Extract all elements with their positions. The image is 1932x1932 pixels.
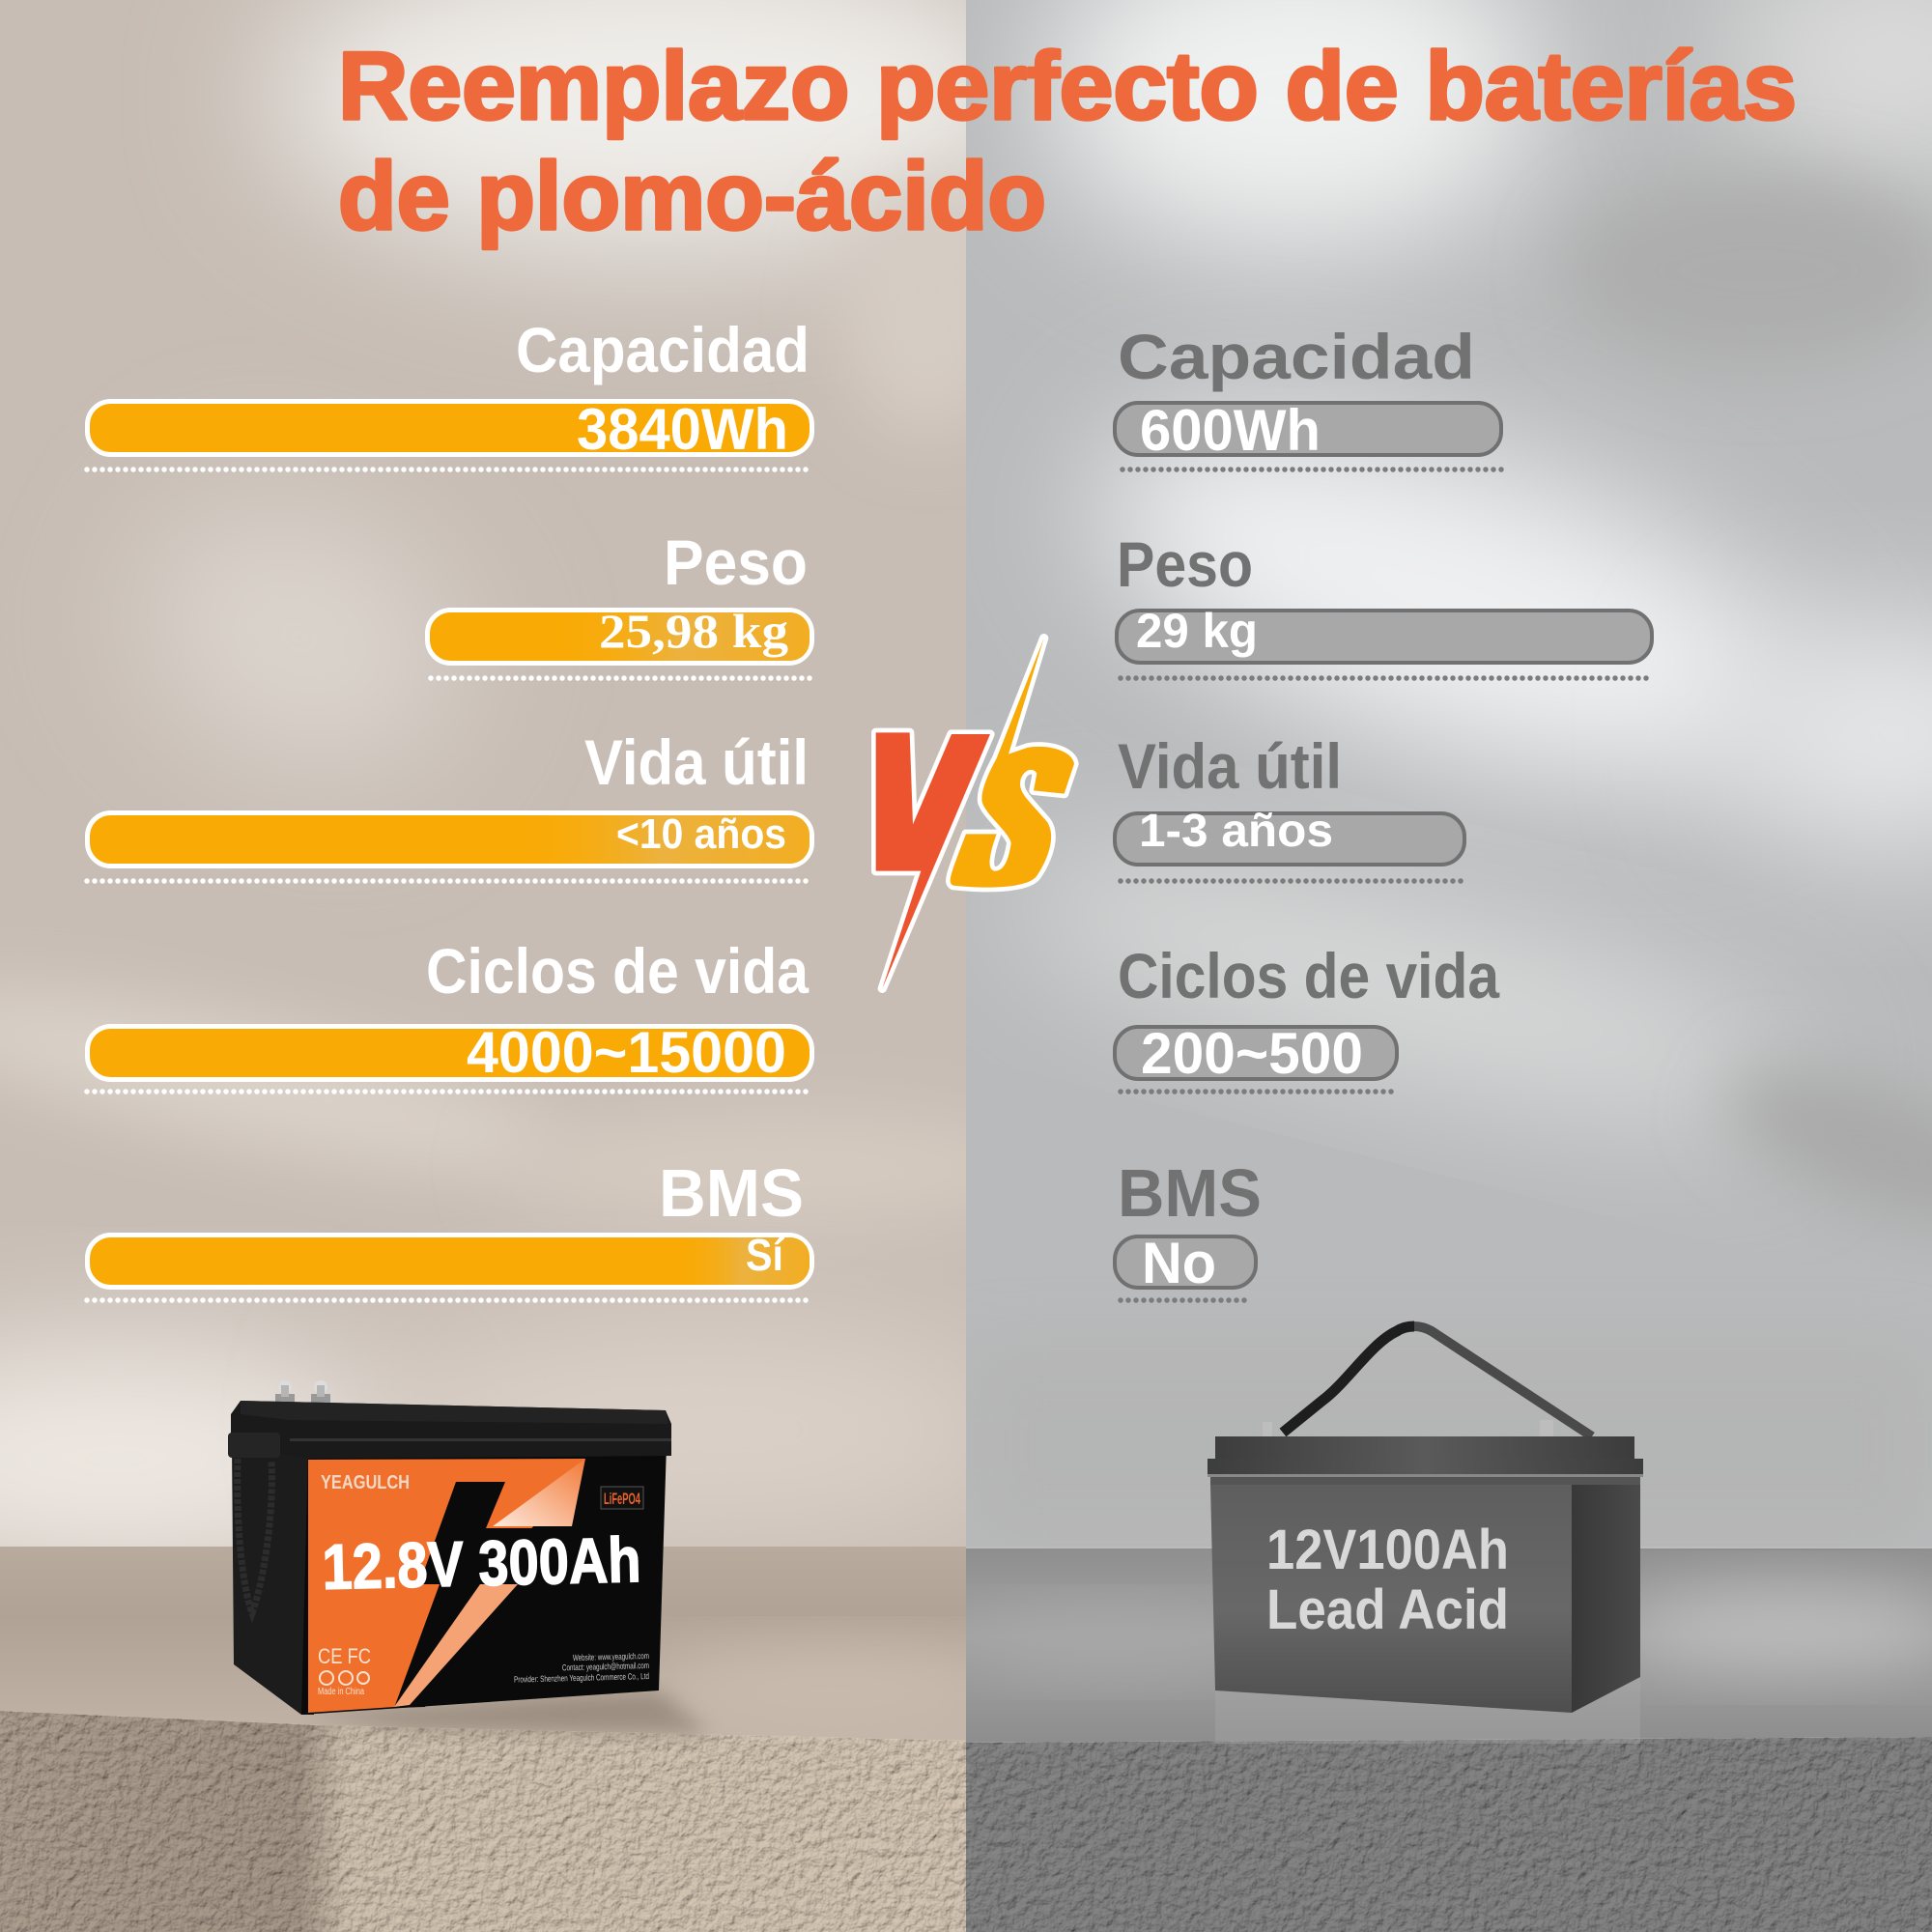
metric: bms right [1115,1155,1262,1300]
panel: left metrics [87,314,813,1300]
metric: peso left: Peso [664,526,808,598]
orange label [308,1459,585,1713]
metric: ciclos right: Ciclos de vida [1118,940,1500,1011]
metric: peso left: 25,98 kg [599,604,788,658]
front face [1210,1485,1572,1713]
black bolt [394,1482,537,1708]
reflection [1215,1677,1640,1744]
icon: LiFePO4 battery [228,1380,710,1734]
metric: bms right: No [1142,1231,1216,1295]
metric: ciclos right: 200~500 [1141,1021,1363,1086]
strap [1283,1326,1414,1433]
letter V [876,732,990,988]
metric: bms left [87,1155,813,1300]
metric: capacidad left [87,314,813,469]
contact text: Contact: yeagulch@hotmail.com [562,1661,649,1672]
battery shadow [301,1690,710,1734]
metric: vida util right [1115,730,1464,881]
metric: peso right: Peso [1117,528,1253,600]
panel: left warm background [0,0,1043,1932]
metric: vida util left: Vida útil [584,726,809,798]
left textured ledge [0,1711,966,1932]
left tabletop [0,1547,966,1749]
title [338,32,1797,249]
terminals [1263,1420,1553,1436]
contact text [514,1651,649,1685]
metric: bms left: Sí [746,1230,785,1280]
logo: YEAGULCH [321,1472,410,1493]
contact text: Website: www.yeagulch.com [573,1651,649,1662]
metric: capacidad right [1115,321,1502,469]
metric: peso right [1117,528,1652,678]
lid [1215,1436,1634,1460]
certification marks: Made in China [318,1687,364,1697]
metric: ciclos left [87,935,813,1092]
panel: right metrics [1115,321,1652,1300]
label 12V100Ah: 12V100Ah [1266,1519,1509,1581]
metric: ciclos left: Ciclos de vida [426,935,810,1007]
contact text: Provider: Shenzhen Yeagulch Commerce Co., Ltd [514,1671,649,1685]
terminals [275,1380,330,1404]
metric: capacidad right: Capacidad [1118,321,1475,392]
metric: bms right: BMS [1118,1155,1262,1231]
metric: vida util right: Vida útil [1118,730,1342,802]
lid [231,1401,671,1459]
title: de plomo-ácido [338,142,1046,249]
right tabletop [966,1547,1932,1745]
icon: lead acid battery [1208,1326,1643,1744]
letter S [951,639,1074,888]
light bolt wedge [493,1459,585,1526]
LiFePO4 tag [601,1487,643,1509]
metric: capacidad left: Capacidad [516,314,810,385]
metric: capacidad left: 3840Wh [577,397,788,462]
label Lead Acid: Lead Acid [1266,1578,1509,1641]
metric: vida util left: <10 años [616,810,786,858]
rope [238,1459,271,1613]
capacity text: 12.8V 300Ah [322,1523,641,1603]
metric: vida util left [87,726,813,881]
handle bracket [228,1433,280,1458]
metric: vida util right: 1-3 años [1139,806,1333,857]
metric: ciclos left: 4000~15000 [467,1020,786,1085]
light bolt stripe [394,1584,518,1707]
side face [1572,1485,1640,1713]
metric: bms left: BMS [659,1155,804,1231]
panel: right grey background [966,0,1932,1932]
metric: capacidad right: 600Wh [1140,398,1321,463]
metric: peso left [427,526,813,678]
certification marks [318,1644,371,1697]
right textured ledge [966,1737,1932,1932]
metric: ciclos right [1115,940,1500,1092]
certification marks: CE FC [318,1644,371,1668]
title: Reemplazo perfecto de baterías [338,32,1797,139]
metric: peso right: 29 kg [1136,604,1258,658]
battery case [232,1444,314,1715]
icon: VS lightning badge [876,639,1074,988]
LiFePO4 tag: LiFePO4 [604,1490,640,1508]
